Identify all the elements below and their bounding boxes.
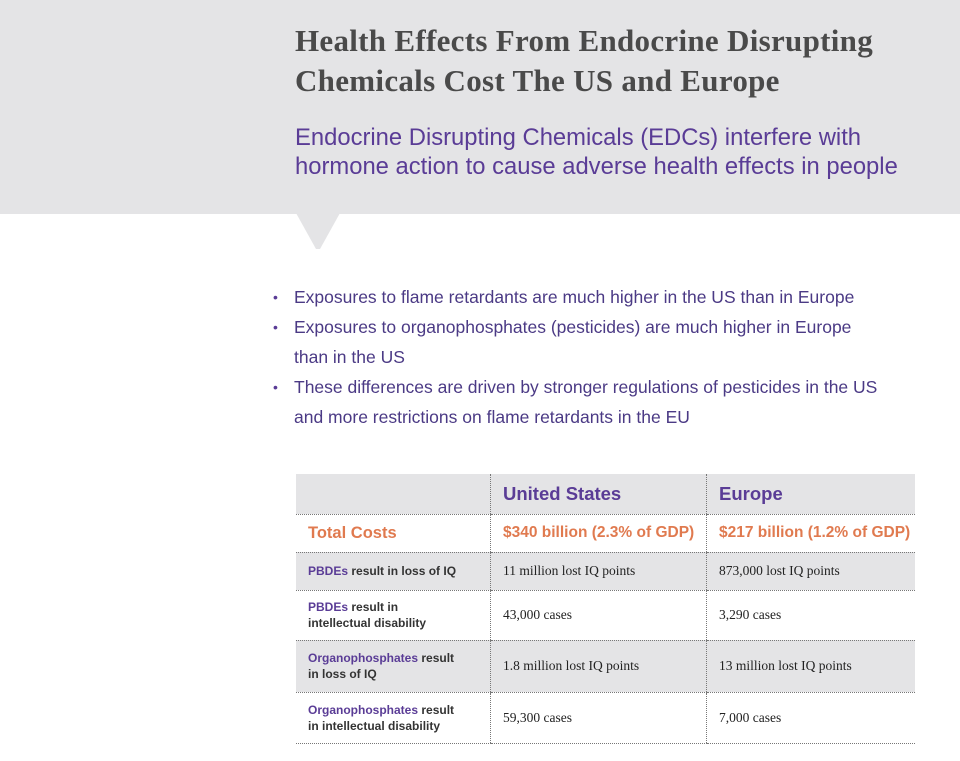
cost table: United States: [503, 483, 621, 504]
cost table: PBDEs result in: [308, 600, 398, 614]
bullet list: Exposures to organophosphates (pesticides) are much higher in Europe: [294, 317, 851, 337]
header band: [0, 0, 960, 214]
cost table: 43,000 cases: [503, 607, 572, 622]
cost table: 1.8 million lost IQ points: [503, 658, 639, 673]
subtitle: Endocrine Disrupting Chemicals (EDCs) interfere with hormone action to cause adverse health effects in people: [295, 124, 898, 180]
cost table: in intellectual disability: [308, 718, 440, 732]
cost table: $217 billion (1.2% of GDP): [719, 524, 910, 541]
cost table: Organophosphates result: [308, 702, 454, 716]
title: Health Effects From Endocrine Disrupting Chemicals Cost The US and Europe: [295, 23, 873, 98]
bullet list: and more restrictions on flame retardants in the EU: [294, 407, 690, 427]
cost table: 3,290 cases: [719, 607, 781, 622]
bullet list: than in the US: [294, 347, 405, 367]
bullet list: Exposures to flame retardants are much higher in the US than in Europe: [294, 287, 854, 307]
cost table: 873,000 lost IQ points: [719, 563, 840, 578]
cost table: intellectual disability: [308, 616, 426, 630]
cost table: PBDEs result in loss of IQ: [308, 564, 456, 578]
cost table: 7,000 cases: [719, 710, 781, 724]
cost table: in loss of IQ: [308, 667, 377, 681]
cost table: $340 billion (2.3% of GDP): [503, 524, 694, 541]
cost table: Organophosphates result: [308, 651, 454, 665]
bullet list: These differences are driven by stronger regulations of pesticides in the US: [294, 377, 877, 397]
cost table: 13 million lost IQ points: [719, 658, 852, 673]
cost table: Europe: [719, 483, 783, 504]
cost table: [296, 474, 915, 744]
cost table: 11 million lost IQ points: [503, 563, 635, 578]
pointer triangle: [296, 214, 340, 249]
bullet list: [274, 287, 877, 427]
cost table: 59,300 cases: [503, 710, 572, 724]
cost table: Total Costs: [308, 524, 397, 542]
